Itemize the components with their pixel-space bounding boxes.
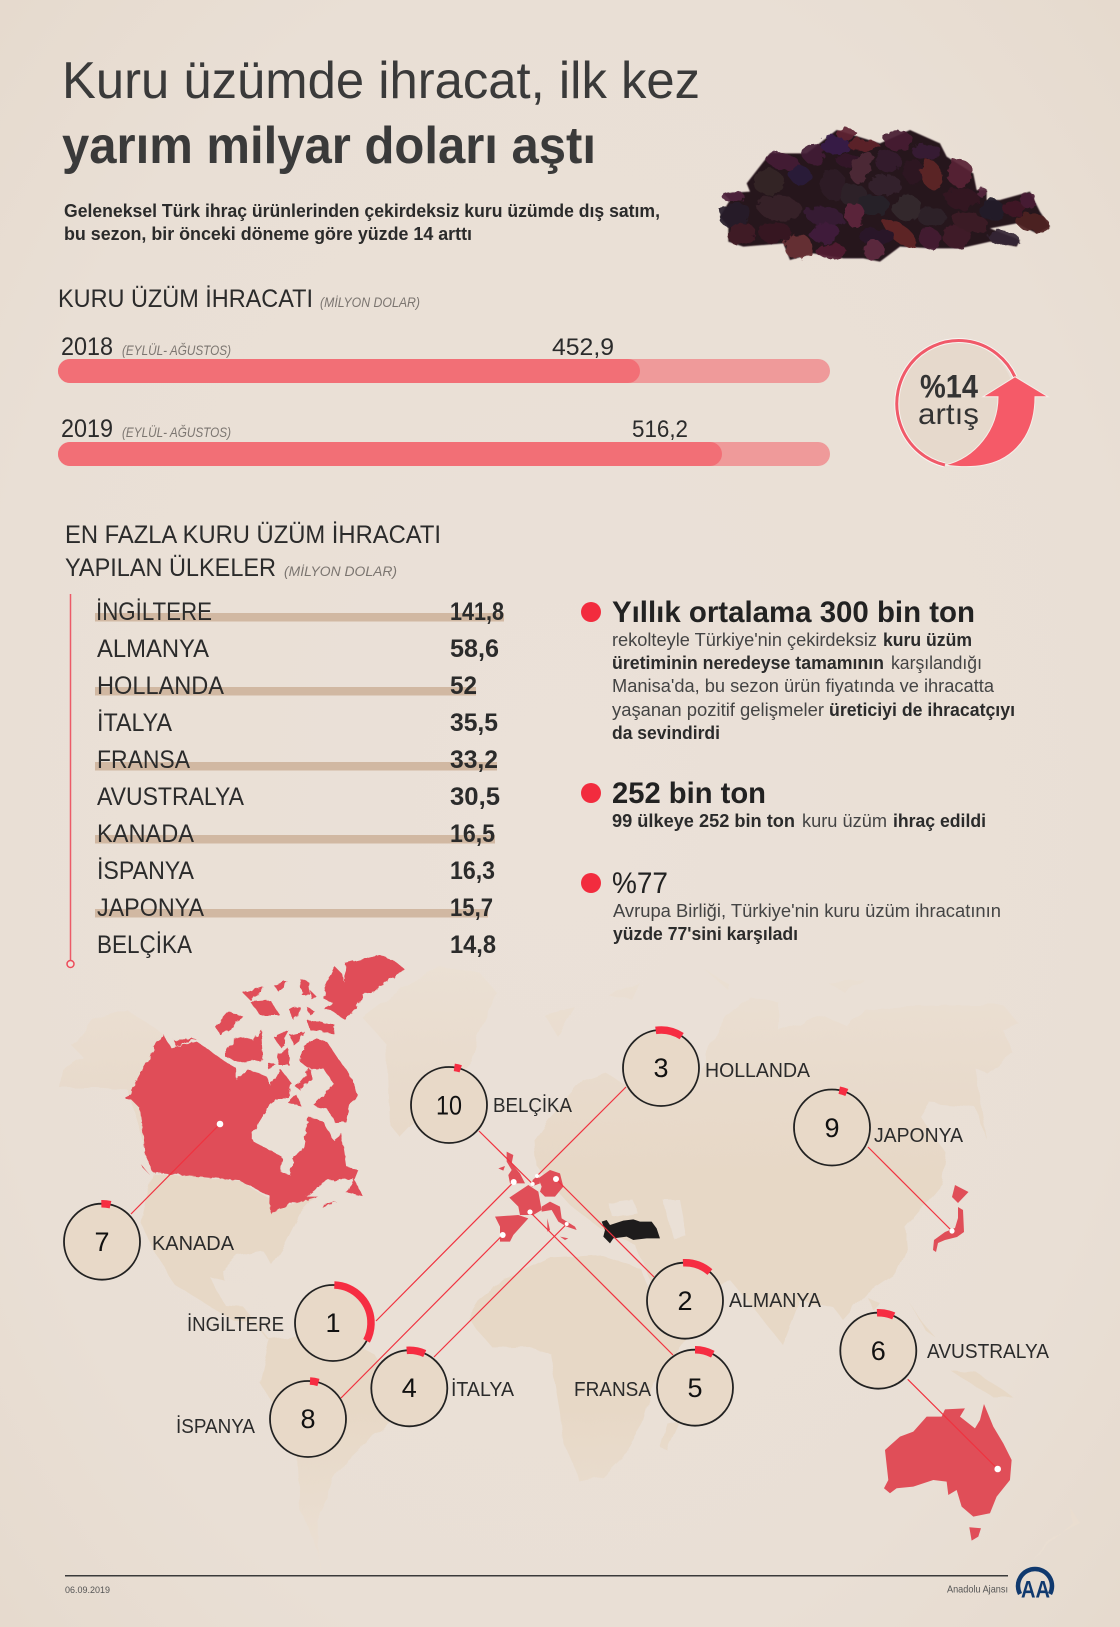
footer (65, 1576, 1008, 1596)
text block: 252 thousand tons: 252 bin ton (612, 777, 766, 810)
rank marker 4: İtalya (369, 1348, 515, 1429)
bar chart: 2019: (EYLÜL- AĞUSTOS) (122, 423, 231, 440)
row: Fransa (95, 746, 498, 774)
heading: top countries: EN FAZLA KURU ÜZÜM İHRACATI (65, 520, 441, 549)
row: Belçika: BELÇİKA (97, 930, 192, 959)
row: Avustralya (97, 783, 500, 811)
rank marker 10: Belçika (406, 1062, 573, 1148)
row: Hollanda (95, 672, 477, 700)
row: Kanada: KANADA (97, 820, 194, 848)
title: Kuru üzümde ihracat, ilk kez (62, 52, 700, 110)
text block: 77 percent (581, 867, 1001, 944)
bar chart: 2018 (58, 333, 830, 383)
text block: 300 thousand tons: Manisa'da, bu sezon ürün fiyatında ve ihracatta (612, 676, 995, 696)
row: Almanya: 58,6 (450, 635, 499, 663)
text block: 300 thousand tons: rekolteyle Türkiye'nin çekirdeksiz (612, 630, 877, 650)
footer: Anadolu Ajansı (947, 1584, 1008, 1596)
rank marker 7: Kanada: 7 (94, 1227, 110, 1257)
connector lines (131, 1087, 998, 1469)
icon: upward arrow (945, 377, 1048, 467)
map: Western Europe countries (495, 1152, 577, 1242)
row: Fransa: 33,2 (450, 746, 498, 774)
row: Almanya: ALMANYA (97, 635, 209, 663)
map: Japan (933, 1185, 968, 1252)
row: Fransa: FRANSA (97, 746, 190, 774)
rank marker 10: Belçika: BELÇİKA (493, 1094, 573, 1117)
rank marker 2: Almanya: 2 (677, 1286, 693, 1316)
rank marker 3: Hollanda: HOLLANDA (705, 1060, 811, 1082)
rank marker 2: Almanya (645, 1261, 822, 1341)
row: İspanya (97, 856, 495, 885)
map: Canada (126, 955, 405, 1213)
rank marker 9: Japonya (787, 1083, 964, 1172)
text block: 77 percent: yüzde 77'sini karşıladı (613, 924, 798, 944)
row: İspanya: 16,3 (450, 857, 495, 885)
map: Turkey (602, 1219, 660, 1243)
row: Almanya (97, 635, 499, 663)
callout: 14 percent increase (895, 340, 1048, 467)
rank marker 5: Fransa: FRANSA (574, 1379, 652, 1401)
world map background (60, 967, 1080, 1575)
text block: 252 thousand tons: ihraç edildi (893, 811, 986, 831)
bar chart: 2019: 516,2 (632, 416, 688, 443)
text block: 300 thousand tons: karşılandığı (891, 653, 982, 673)
text block: 252 thousand tons: kuru üzüm (802, 811, 887, 831)
rank marker 2: Almanya: ALMANYA (729, 1290, 822, 1312)
callout: 14 percent increase: %14 (920, 368, 978, 404)
heading: top countries: (MİLYON DOLAR) (284, 563, 397, 579)
rank marker 4: İtalya: İTALYA (451, 1378, 515, 1401)
map: inland seas (210, 1200, 687, 1307)
row: Avustralya: 30,5 (450, 783, 500, 811)
bar chart: 2019 (58, 415, 830, 466)
row: İspanya: İSPANYA (97, 856, 194, 885)
subtitle: bu sezon, bir önceki döneme göre yüzde 14 arttı (64, 223, 472, 244)
title (62, 52, 700, 175)
heading: export section: KURU ÜZÜM İHRACATI (58, 284, 313, 313)
rank marker 5: Fransa (574, 1350, 733, 1426)
rank marker 5: Fransa: 5 (687, 1373, 703, 1403)
row: Japonya: JAPONYA (97, 894, 204, 922)
row: Avustralya: AVUSTRALYA (97, 783, 244, 811)
bar chart: 2018: (EYLÜL- AĞUSTOS) (122, 341, 231, 358)
row: Japonya: 15,7 (450, 894, 493, 922)
text block: 300 thousand tons: da sevindirdi (612, 723, 720, 743)
title: yarım milyar doları aştı (62, 117, 596, 175)
row: İtalya: İTALYA (97, 708, 172, 737)
row: Belçika (97, 930, 496, 959)
rank marker 4: İtalya: 4 (402, 1373, 417, 1403)
rank marker 6: Avustralya (839, 1311, 1050, 1390)
text block: 300 thousand tons: kuru üzüm (883, 630, 972, 650)
subtitle: Geleneksel Türk ihraç ürünlerinden çekirdeksiz kuru üzümde dış satım, (64, 200, 660, 221)
text block: 77 percent: %77 (612, 867, 668, 900)
row: Belçika: 14,8 (450, 931, 496, 959)
icon: Anadolu Ajansı logo (1018, 1569, 1052, 1604)
rank marker 7: Kanada: KANADA (152, 1233, 235, 1255)
callout: 14 percent increase: artış (918, 398, 979, 431)
rank marker 9: Japonya: JAPONYA (874, 1125, 964, 1147)
text block: 252 thousand tons (581, 777, 986, 831)
row: Kanada (95, 820, 495, 848)
rank marker 6: Avustralya: AVUSTRALYA (927, 1341, 1050, 1363)
text block: 300 thousand tons: üretiminin neredeyse tamamının (612, 653, 884, 673)
rank marker 8: İspanya: İSPANYA (176, 1415, 256, 1438)
row: İtalya: 35,5 (450, 709, 498, 737)
map: location dots (217, 1121, 1001, 1472)
row: İngiltere: 141,8 (450, 598, 504, 626)
rank marker 3: Hollanda (618, 1025, 811, 1111)
row: Hollanda: HOLLANDA (97, 672, 224, 700)
rank marker 1: İngiltere: 1 (325, 1308, 341, 1338)
row: Japonya (95, 894, 493, 922)
rank marker 1: İngiltere: İNGİLTERE (187, 1313, 284, 1336)
row: Hollanda: 52 (450, 672, 477, 700)
icon: Anadolu Ajansı logo: AA (1021, 1576, 1050, 1604)
text block: 300 thousand tons: Yıllık ortalama 300 bin ton (612, 596, 975, 629)
heading: top countries (65, 520, 441, 582)
row: Kanada: 16,5 (450, 820, 495, 848)
text block: 77 percent: Avrupa Birliği, Türkiye'nin kuru üzüm ihracatının (613, 901, 1001, 921)
bar chart: 2018: 452,9 (552, 334, 614, 361)
bar chart: 2018: 2018 (61, 333, 113, 361)
text block: 300 thousand tons (581, 596, 1015, 743)
rank marker 6: Avustralya: 6 (871, 1336, 886, 1366)
row: İngiltere (95, 597, 504, 626)
row: İtalya (97, 708, 498, 737)
rank marker 3: Hollanda: 3 (653, 1053, 669, 1083)
list: top countries table (67, 594, 504, 968)
rank marker 8: İspanya: 8 (300, 1404, 316, 1434)
icon: raisins pile (716, 129, 1051, 262)
row: İngiltere: İNGİLTERE (96, 597, 212, 626)
footer: 06.09.2019 (65, 1585, 110, 1596)
subtitle (64, 200, 660, 244)
text block: 252 thousand tons: 99 ülkeye 252 bin ton (612, 811, 795, 831)
heading: export section: (MİLYON DOLAR) (320, 294, 420, 310)
rank marker 9: Japonya: 9 (824, 1113, 840, 1143)
text block: 300 thousand tons: üreticiyi de ihracatçıyı (829, 700, 1015, 720)
text block: 300 thousand tons: yaşanan pozitif gelişmeler (612, 700, 824, 720)
rank marker 7: Kanada (63, 1203, 235, 1280)
map: Australia (884, 1404, 1012, 1541)
heading: top countries: YAPILAN ÜLKELER (65, 554, 276, 582)
bar chart: 2019: 2019 (61, 415, 113, 443)
rank marker 10: Belçika: 10 (436, 1090, 462, 1120)
rank marker 1: İngiltere (187, 1284, 372, 1362)
rank marker 8: İspanya (176, 1379, 348, 1459)
